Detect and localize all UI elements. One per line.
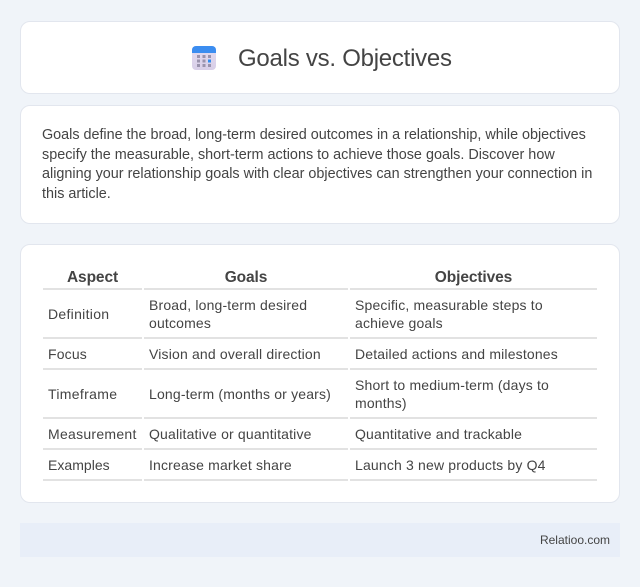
row: examples xyxy=(48,457,546,473)
row: focus xyxy=(48,346,558,362)
row: definition: Definition xyxy=(48,306,109,322)
text block: introduction: this article. xyxy=(42,186,111,202)
row: focus: Detailed actions and milestones xyxy=(355,346,558,362)
row: definition: Broad, long-term desired xyxy=(149,297,307,313)
panel: introduction xyxy=(20,105,620,224)
row: timeframe: Short to medium-term (days to xyxy=(355,377,549,393)
row: definition xyxy=(48,297,543,331)
table header: Objectives xyxy=(435,269,512,286)
row: timeframe: Timeframe xyxy=(48,386,117,402)
row: timeframe: Long-term (months or years) xyxy=(149,386,331,402)
table header: Aspect xyxy=(67,269,118,286)
row: examples: Increase market share xyxy=(149,457,292,473)
text block: introduction xyxy=(42,127,592,202)
row: measurement: Quantitative and trackable xyxy=(355,426,522,442)
title: Goals vs. Objectives xyxy=(238,45,452,72)
row: measurement: Measurement xyxy=(48,426,137,442)
text block: introduction: aligning your relationship goals with clear objectives can strengthen your connection in xyxy=(42,166,592,182)
footer text: Relatioo.com xyxy=(540,533,610,547)
row: examples: Launch 3 new products by Q4 xyxy=(355,457,546,473)
row: measurement xyxy=(48,426,522,442)
row: measurement: Qualitative or quantitative xyxy=(149,426,312,442)
footer bar xyxy=(20,523,620,557)
text block: introduction: specify the measurable, short-term actions to achieve those goals. Discover how xyxy=(42,146,555,162)
row: focus: Vision and overall direction xyxy=(149,346,321,362)
row: examples: Examples xyxy=(48,457,110,473)
table header xyxy=(67,269,512,286)
panel: comparison table xyxy=(20,244,620,503)
row: focus: Focus xyxy=(48,346,87,362)
row: definition: outcomes xyxy=(149,315,211,331)
text block: introduction: Goals define the broad, long-term desired outcomes in a relationship, while objectives xyxy=(42,127,586,143)
row: definition: achieve goals xyxy=(355,315,443,331)
row: definition: Specific, measurable steps to xyxy=(355,297,543,313)
icon: calendar xyxy=(192,46,216,70)
panel: title card xyxy=(20,21,620,94)
row: timeframe xyxy=(48,377,549,411)
table header: Goals xyxy=(225,269,267,286)
row: timeframe: months) xyxy=(355,395,407,411)
